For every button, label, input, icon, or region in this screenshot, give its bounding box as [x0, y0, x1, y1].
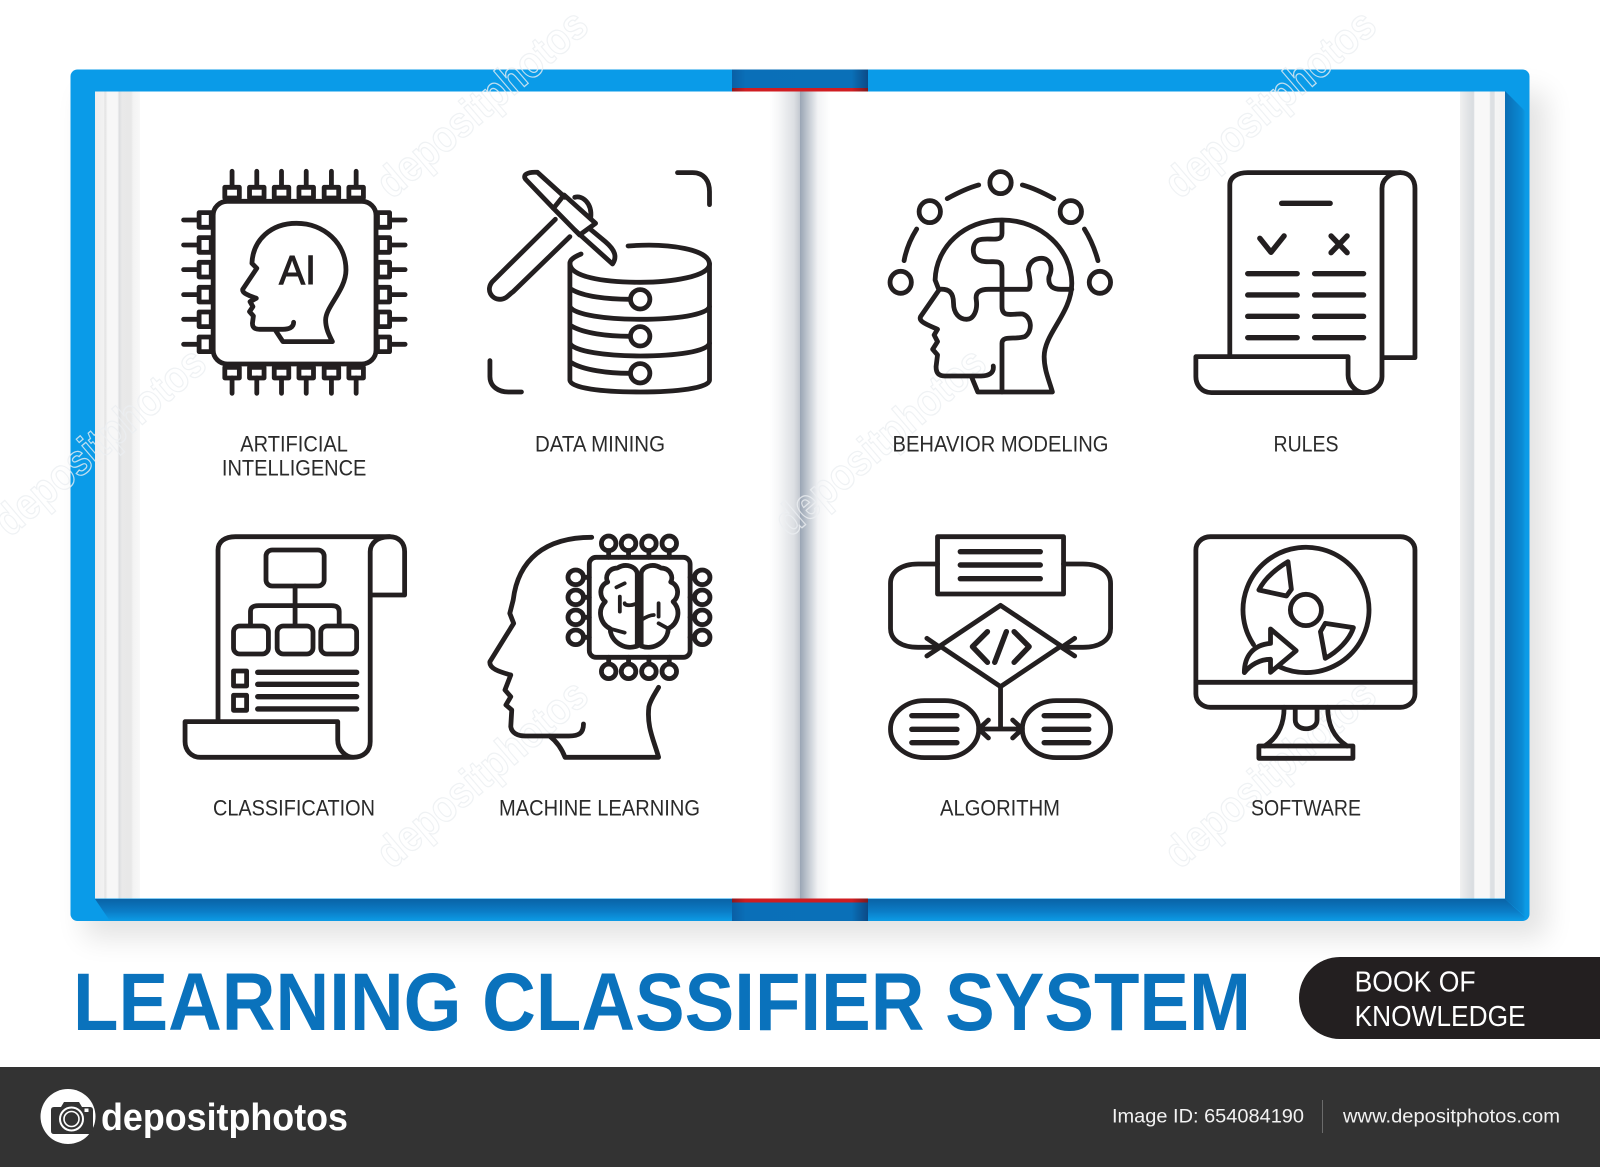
book cover [70, 70, 1530, 921]
icon: software monitor [1196, 537, 1415, 758]
cover bottom edge [95, 899, 1525, 921]
title: LEARNING CLASSIFIER SYSTEM [73, 957, 1251, 1048]
badge: book of knowledge: KNOWLEDGE [1355, 1001, 1526, 1033]
label: data mining: DATA MINING [535, 432, 665, 456]
spine bottom [732, 898, 868, 921]
icon: behavior modeling [890, 172, 1111, 392]
label: machine learning: MACHINE LEARNING [499, 796, 700, 820]
label: rules: RULES [1274, 432, 1338, 456]
watermarks: depositphotos [1155, 670, 1385, 878]
left page [95, 92, 800, 898]
label: artificial intelligence [222, 432, 366, 480]
book shadow [84, 92, 1546, 938]
badge: book of knowledge: BOOK OF [1355, 966, 1476, 998]
icon: rules scroll [1196, 173, 1415, 393]
cover right edge [1505, 91, 1526, 917]
icon: data mining [489, 172, 709, 392]
badge: book of knowledge [1299, 957, 1600, 1039]
icon: artificial intelligence chip: AI [279, 247, 316, 293]
icon: algorithm flowchart [891, 537, 1111, 758]
label: software: SOFTWARE [1251, 796, 1361, 820]
right page [800, 92, 1505, 898]
logo wordmark: depositphotos [101, 1097, 348, 1139]
spine top [732, 70, 868, 92]
label: artificial intelligence: INTELLIGENCE [222, 456, 366, 480]
label: classification: CLASSIFICATION [213, 796, 375, 820]
watermarks: depositphotos [765, 338, 995, 546]
icon: classification scroll [185, 537, 405, 757]
footer bar [0, 1067, 1600, 1167]
website: www.depositphotos.com [1342, 1106, 1560, 1128]
label: algorithm: ALGORITHM [940, 796, 1060, 820]
watermarks: depositphotos [367, 670, 597, 878]
logo: camera [40, 1089, 96, 1144]
image id: Image ID: 654084190 [1112, 1106, 1304, 1128]
label: artificial intelligence: ARTIFICIAL [240, 432, 348, 456]
watermarks [0, 0, 1385, 878]
icon: artificial intelligence chip [184, 171, 405, 393]
icon: machine learning [490, 536, 710, 757]
label: behavior modeling: BEHAVIOR MODELING [892, 432, 1108, 456]
book [70, 70, 1530, 921]
